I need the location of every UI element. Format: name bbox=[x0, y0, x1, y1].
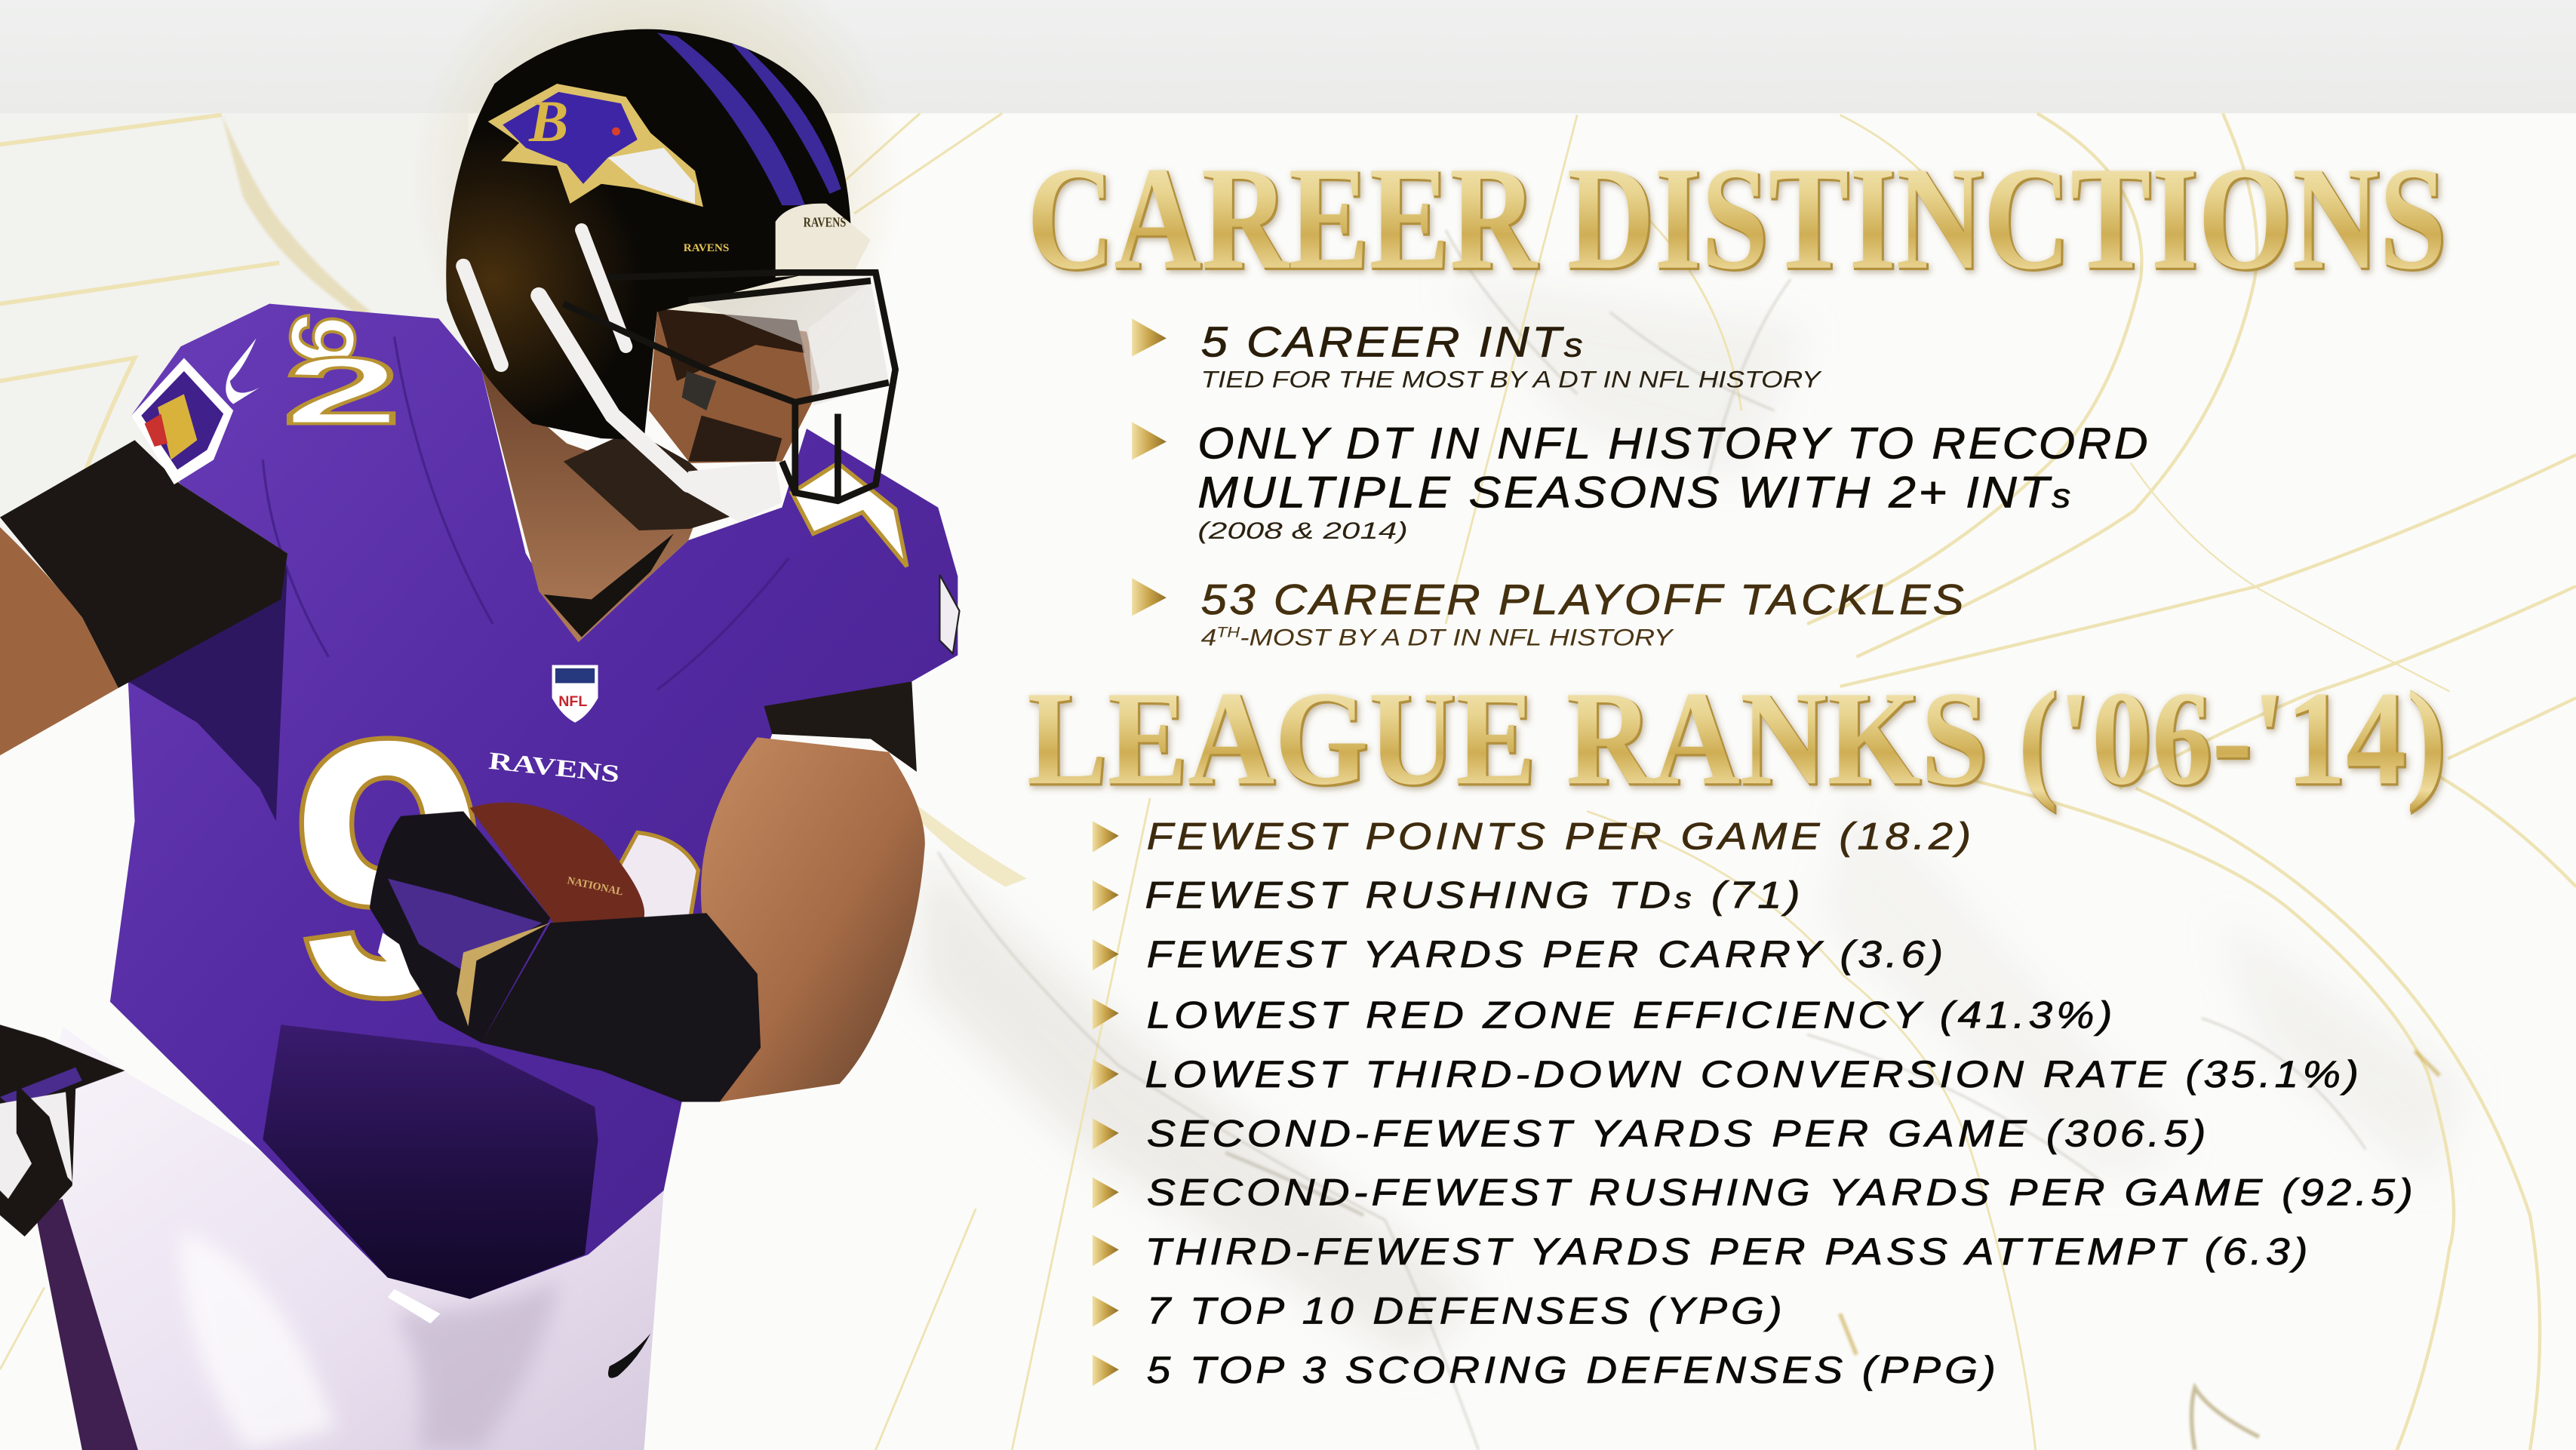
right shoulder patch bbox=[939, 575, 960, 653]
career bullet 2: MULTIPLE SEASONS WITH 2+ INT s bbox=[1197, 468, 2073, 518]
pants bbox=[41, 1026, 664, 1450]
heading: league ranks: LEAGUE RANKS ('06-'14) bbox=[1027, 663, 2446, 813]
chest NFL shield bbox=[552, 665, 598, 723]
career bullet 2: ONLY DT IN NFL HISTORY TO RECORD bbox=[1197, 419, 2150, 468]
nike on sleeve bbox=[226, 338, 260, 404]
ravens helmet logo: B bbox=[528, 88, 568, 154]
rank 6: SECOND-FEWEST YARDS PER GAME (306.5) bbox=[1147, 1112, 2209, 1154]
face bbox=[649, 312, 819, 463]
career bullet 2 bbox=[1132, 419, 2150, 544]
rank 3: FEWEST YARDS PER CARRY (3.6) bbox=[1147, 933, 1947, 975]
beard bbox=[564, 430, 744, 530]
far shoulder number bbox=[792, 463, 907, 567]
chest RAVENS wordmark: RAVENS bbox=[487, 748, 621, 788]
helmet nameplate text: RAVENS bbox=[684, 241, 729, 254]
glove bbox=[370, 811, 550, 1043]
jersey seams bbox=[263, 336, 788, 690]
black undershirt sleeve left bbox=[0, 440, 287, 688]
forearm compression sleeve bbox=[481, 913, 761, 1102]
career bullet 1: 5 CAREER INT s bbox=[1201, 318, 1585, 365]
career bullet 1 bbox=[1132, 318, 1822, 393]
left glove and wrist bbox=[0, 1025, 124, 1236]
player photo bbox=[0, 29, 960, 1450]
league rank list bbox=[1093, 815, 2417, 1391]
shoulder number 92 bbox=[226, 306, 401, 444]
helmet shell bbox=[446, 29, 851, 440]
neck and skin bbox=[481, 370, 706, 642]
helmet halo bbox=[410, 0, 904, 427]
upper right black sleeve bbox=[764, 681, 917, 772]
visor bbox=[688, 281, 889, 406]
rank 2: FEWEST RUSHING TD s (71) bbox=[1145, 874, 1804, 917]
big chest number: 9 bbox=[289, 663, 490, 1074]
shoulder number 92: 2 bbox=[282, 338, 401, 444]
chest NFL shield: NFL bbox=[558, 693, 587, 710]
pants shading bbox=[395, 1281, 558, 1450]
soft grey marble clouds bbox=[920, 279, 2464, 1363]
career bullet 3: TH bbox=[1216, 625, 1240, 641]
facemask bbox=[564, 272, 896, 501]
rank 4: LOWEST RED ZONE EFFICIENCY (41.3%) bbox=[1147, 994, 2116, 1037]
career bullet 1: TIED FOR THE MOST BY A DT IN NFL HISTORY bbox=[1201, 366, 1822, 393]
right arm bbox=[701, 737, 925, 1102]
shoulder number 92: 9 bbox=[268, 306, 377, 373]
helmet stripe bbox=[657, 33, 805, 205]
big chest number bbox=[289, 663, 698, 1074]
career bullet 3: 53 CAREER PLAYOFF TACKLES bbox=[1201, 576, 1966, 623]
player photo: NATIONAL bbox=[566, 874, 624, 899]
undershirt collar bbox=[544, 533, 674, 637]
rank 1: FEWEST POINTS PER GAME (18.2) bbox=[1147, 815, 1975, 857]
rank 9: 7 TOP 10 DEFENSES (YPG) bbox=[1147, 1289, 1786, 1332]
career bullet 3: 4 bbox=[1201, 623, 1214, 650]
rank 8: THIRD-FEWEST YARDS PER PASS ATTEMPT (6.3) bbox=[1145, 1230, 2311, 1273]
marble veins bbox=[938, 230, 2439, 1450]
rank 5: LOWEST THIRD-DOWN CONVERSION RATE (35.1%) bbox=[1145, 1053, 2362, 1095]
football bbox=[470, 803, 644, 941]
heading: league ranks: LEAGUE RANKS ('06-'14) bbox=[1028, 665, 2448, 814]
rank 10: 5 TOP 3 SCORING DEFENSES (PPG) bbox=[1147, 1349, 2000, 1391]
rank 7: SECOND-FEWEST RUSHING YARDS PER GAME (92.5) bbox=[1147, 1172, 2417, 1214]
ravens helmet logo bbox=[488, 84, 703, 207]
dark lower panel bbox=[263, 1025, 598, 1299]
career bullet 3: -MOST BY A DT IN NFL HISTORY bbox=[1240, 623, 1674, 650]
chin cup bbox=[682, 462, 782, 522]
chin straps bbox=[463, 230, 688, 484]
dark side mesh bbox=[128, 567, 287, 821]
nike swoosh bbox=[608, 1333, 650, 1378]
leg stripe bbox=[35, 1199, 138, 1450]
career bullet 2: (2008 & 2014) bbox=[1197, 517, 1408, 544]
career bullet 3 bbox=[1132, 576, 1966, 650]
sleeve patch bbox=[131, 358, 233, 484]
player photo: RAVENS bbox=[804, 214, 846, 229]
white helmet bumper bbox=[776, 204, 871, 278]
left arm bbox=[0, 527, 118, 755]
jersey bbox=[110, 304, 958, 1299]
